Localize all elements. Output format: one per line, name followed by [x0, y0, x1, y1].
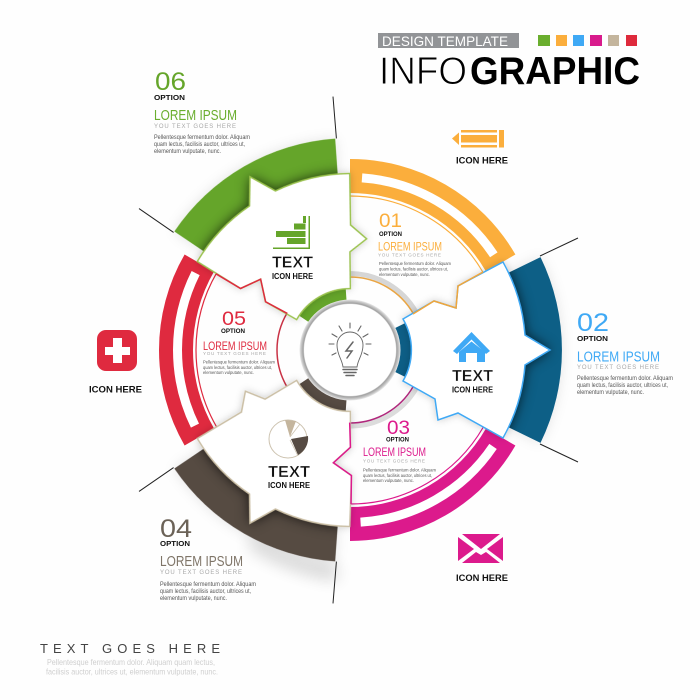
text: option 06	[154, 68, 250, 155]
text: option 05: LOREM IPSUM	[203, 341, 267, 353]
footer text: Pellentesque fermentum dolor. Aliquam quam lectus,	[47, 657, 215, 667]
icon: blue house	[453, 332, 490, 362]
red outline around green blade tooth	[216, 253, 287, 334]
text: option 06: Pellentesque fermentum dolor. Aliquam	[154, 135, 250, 141]
icon: red plus	[97, 330, 137, 371]
icon: envelope	[458, 534, 503, 563]
text: option 04	[160, 515, 256, 602]
text: option 06: OPTION	[154, 93, 185, 102]
center disc	[300, 300, 400, 400]
text: option 03: YOU TEXT GOES HERE	[363, 458, 425, 464]
text: brown blade label: TEXT	[268, 464, 311, 481]
panel: 01 orange sector	[350, 159, 515, 314]
panel: 06 green blade	[138, 96, 368, 322]
text: option 05	[203, 309, 275, 376]
text: option 02: elementum vulputate, nunc.	[577, 390, 644, 396]
title: infographic: INFO	[379, 50, 467, 93]
text: blue blade label: TEXT	[452, 368, 494, 385]
footer text: facilisis auctor, ultrices ut, elementum vulputate, nunc.	[46, 666, 218, 676]
text: option 04: quam lectus, facilisis auctor, ultrices ut,	[160, 589, 251, 595]
icon: pencil	[452, 130, 504, 148]
text: option 01: OPTION	[379, 232, 402, 238]
text: option 03: elementum vulputate, nunc.	[363, 478, 414, 484]
text: option 05: elementum vulputate, nunc.	[203, 370, 254, 376]
text: option 06: YOU TEXT GOES HERE	[154, 124, 236, 130]
text: option 03: OPTION	[386, 438, 409, 444]
text: option 03	[363, 418, 436, 484]
text: option 02	[577, 309, 673, 396]
text: option 03: Pellentesque fermentum dolor. Aliquam	[363, 468, 436, 474]
orange outline around blue blade tooth	[413, 272, 483, 314]
text: option 02: LOREM IPSUM	[577, 350, 660, 366]
text: green blade label	[272, 254, 314, 281]
footer text: TEXT GOES HERE	[40, 641, 220, 656]
title tag: design template: DESIGN TEMPLATE	[382, 33, 508, 49]
text: option 05: Pellentesque fermentum dolor. Aliquam	[203, 360, 275, 366]
shadow under brown ring	[250, 535, 337, 580]
text: option 04: Pellentesque fermentum dolor. Aliquam	[160, 582, 256, 588]
text: brown blade label: ICON HERE	[268, 481, 311, 490]
text: option 06: elementum vulputate, nunc.	[154, 149, 221, 155]
text: option 05: quam lectus, facilisis auctor, ultrices ut,	[203, 365, 272, 371]
footer text	[40, 641, 220, 676]
text: option 06: 06	[155, 68, 186, 96]
text: option 02: quam lectus, facilisis auctor, ultrices ut,	[577, 383, 668, 389]
text: green blade label: ICON HERE	[272, 272, 314, 281]
text: option 01: Pellentesque fermentum dolor. Aliquam	[379, 261, 451, 267]
pink outline around brown blade tooth	[315, 423, 386, 504]
panel: 05 red sector	[102, 225, 319, 446]
text: option 02: 02	[577, 309, 609, 337]
text: option 01: YOU TEXT GOES HERE	[378, 252, 441, 258]
text: option 03: quam lectus, facilisis auctor, ultrices ut,	[363, 473, 432, 479]
text: option 01: LOREM IPSUM	[378, 242, 442, 254]
text: option 04: elementum vulputate, nunc.	[160, 596, 227, 602]
panel: 04 brown blade	[138, 378, 356, 604]
text: option 05: 05	[222, 309, 246, 330]
text: option 02: OPTION	[577, 334, 608, 343]
label: pencil icon here: ICON HERE	[456, 156, 508, 166]
text: option 02: YOU TEXT GOES HERE	[577, 365, 659, 371]
panel: 03 pink sector	[298, 368, 515, 589]
text: blue blade label	[452, 368, 494, 395]
panel: 02 blue blade	[393, 238, 578, 462]
text: option 04: OPTION	[160, 539, 190, 548]
icon: pie chart	[269, 420, 308, 458]
text: option 02: Pellentesque fermentum dolor. Aliquam	[577, 376, 673, 382]
icon: green bar chart	[273, 216, 310, 249]
text: option 04: LOREM IPSUM	[160, 554, 243, 570]
colour swatches	[538, 35, 637, 46]
text: blue blade label: ICON HERE	[452, 386, 494, 395]
label: plus icon here: ICON HERE	[89, 384, 142, 394]
text: option 06: LOREM IPSUM	[154, 108, 237, 124]
text: option 05: OPTION	[221, 329, 245, 335]
text: option 03: 03	[387, 418, 410, 439]
text: option 05: YOU TEXT GOES HERE	[203, 351, 266, 356]
icon: light bulb	[329, 323, 371, 376]
text: option 04: YOU TEXT GOES HERE	[160, 570, 242, 576]
text: option 01: quam lectus, facilisis auctor, ultrices ut,	[379, 266, 448, 272]
label: envelope icon here: ICON HERE	[456, 573, 508, 583]
text: option 01: 01	[379, 211, 402, 232]
text: option 04: 04	[160, 515, 192, 543]
text: option 01	[378, 211, 451, 278]
text: brown blade label	[268, 464, 311, 490]
title: infographic	[379, 50, 640, 93]
text: option 01: elementum vulputate, nunc.	[379, 272, 430, 278]
text: option 06: quam lectus, facilisis auctor, ultrices ut,	[154, 142, 245, 148]
text: option 03: LOREM IPSUM	[363, 447, 426, 459]
text: green blade label: TEXT	[272, 254, 314, 272]
title: infographic: GRAPHIC	[470, 50, 640, 93]
